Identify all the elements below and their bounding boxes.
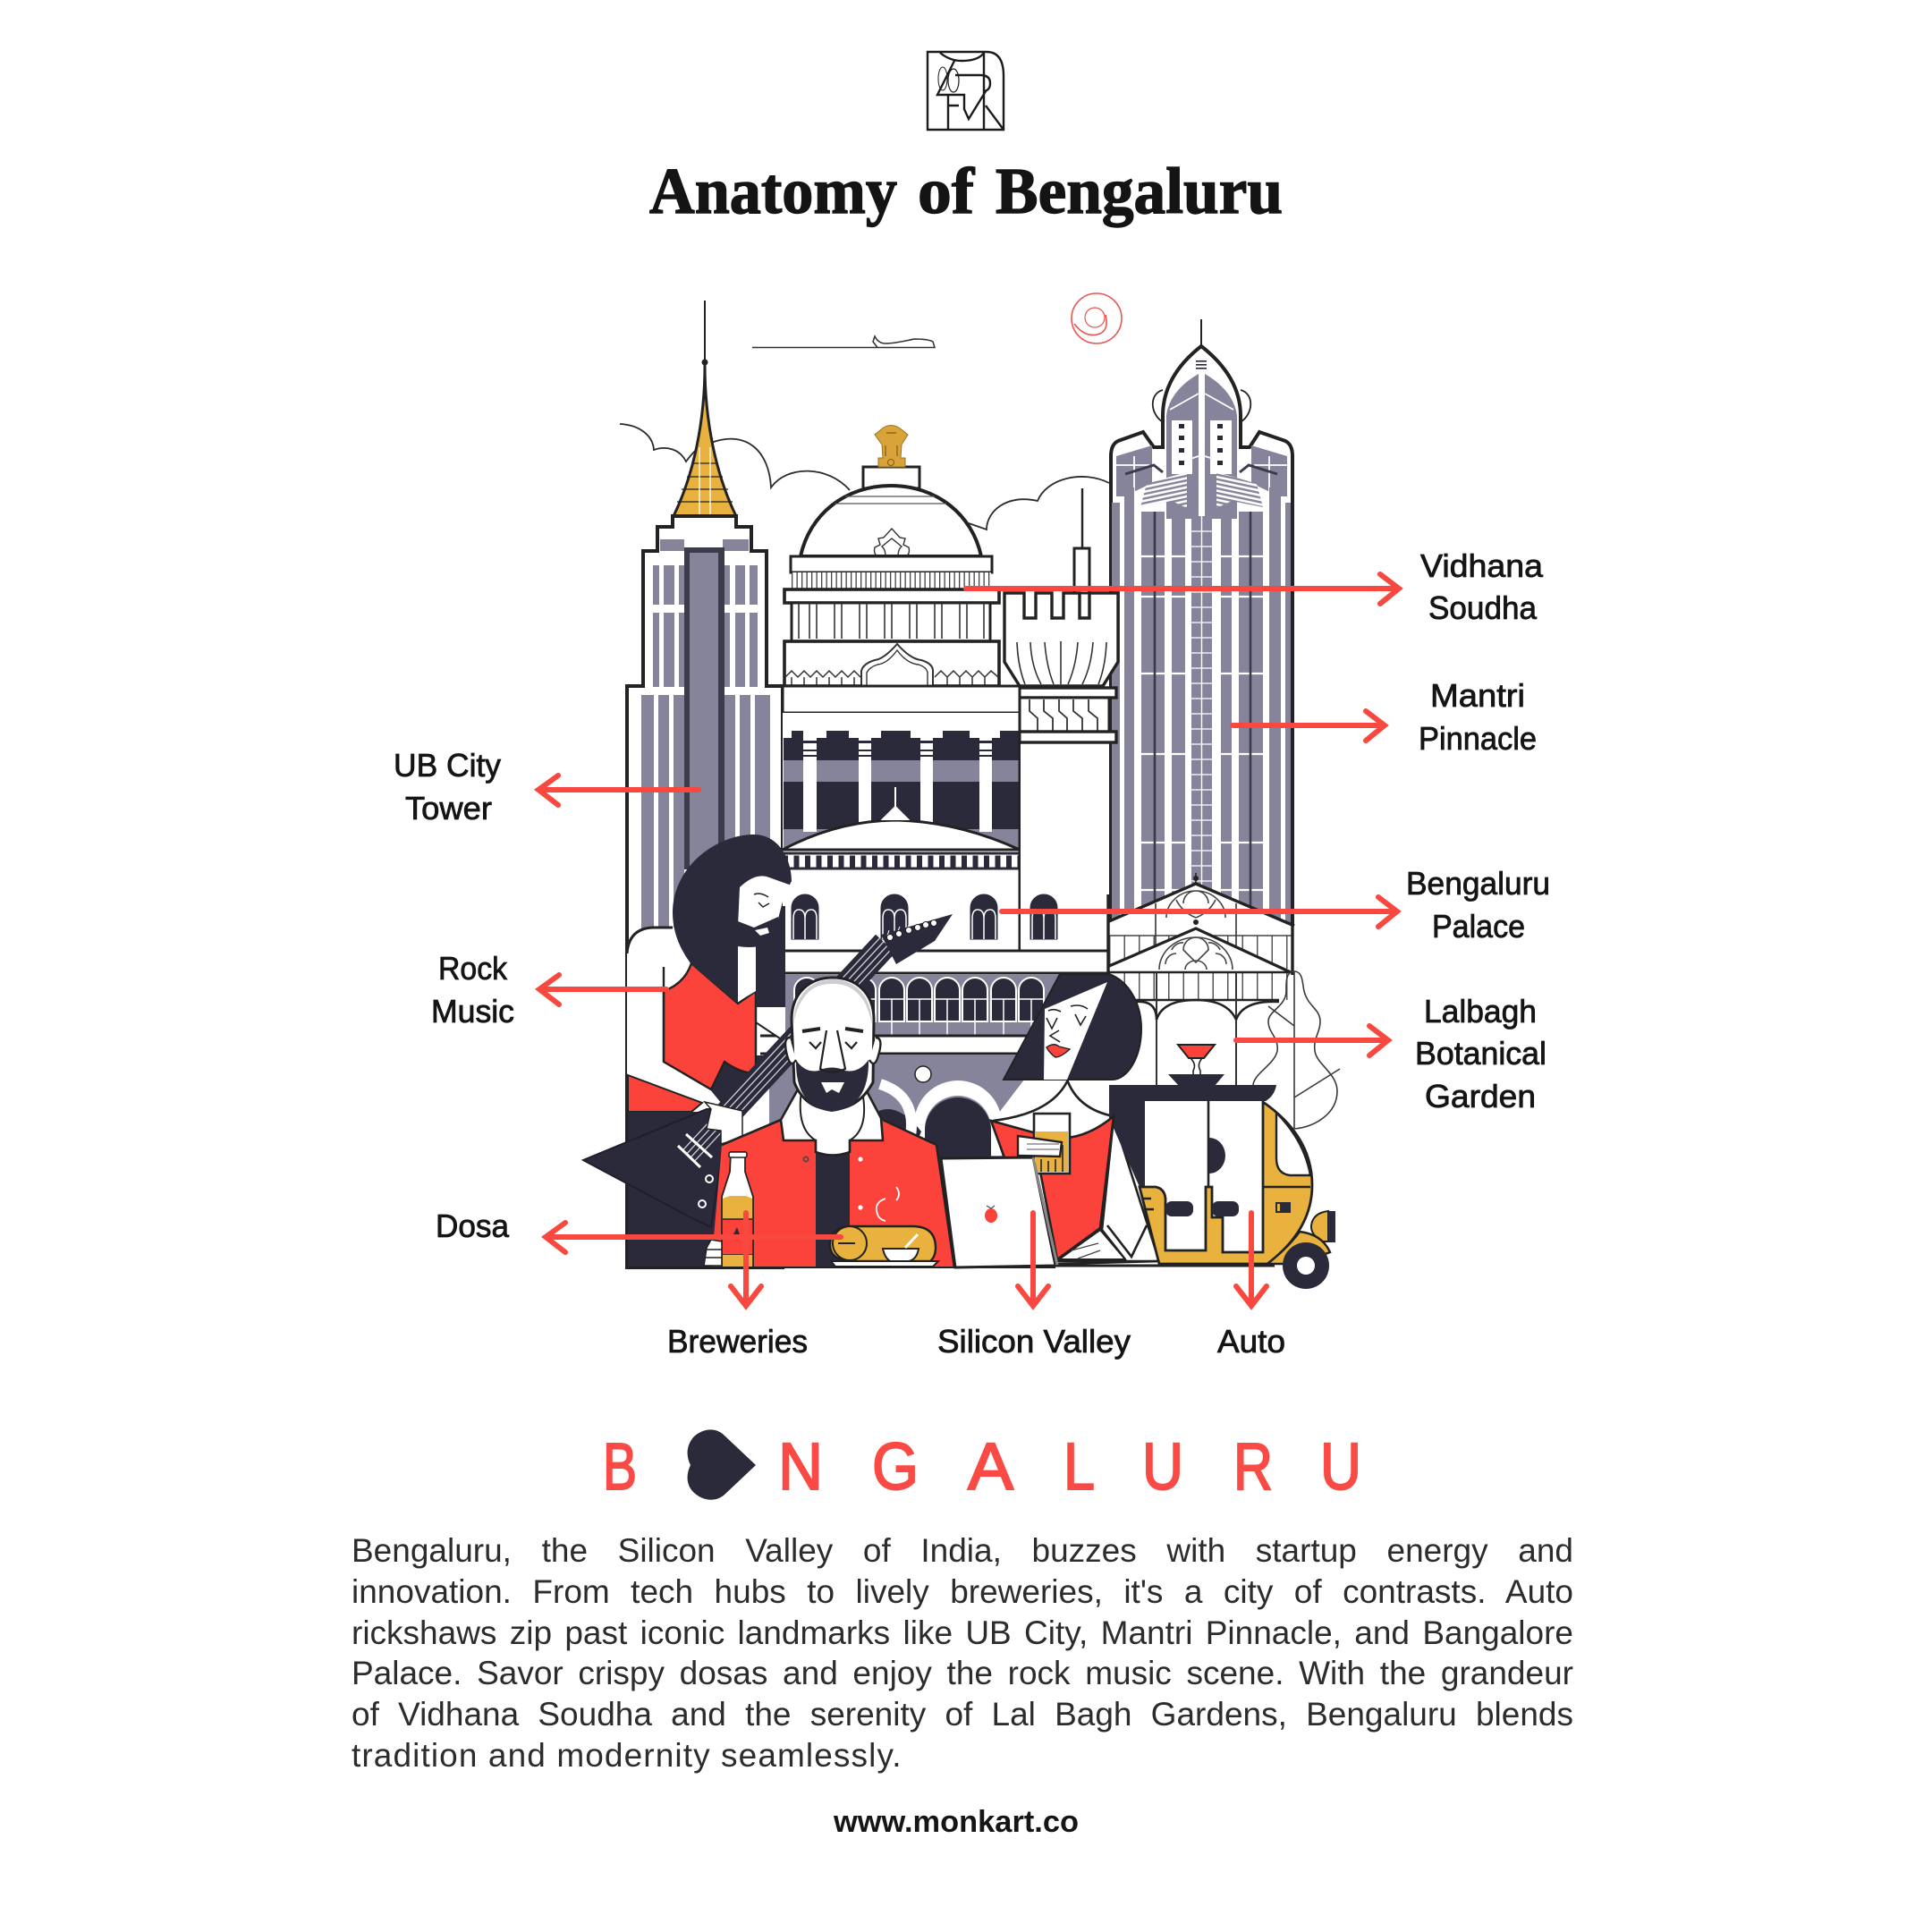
title [649, 155, 1283, 227]
arrow: Auto [1236, 1213, 1267, 1306]
tower spire [674, 365, 736, 516]
palace gate arch [914, 1080, 1002, 1156]
wordmark: BENGALURU: A [968, 1429, 1014, 1504]
wordmark: BENGALURU: N [778, 1429, 823, 1504]
description paragraph: innovation. From tech hubs to lively breweries, it's a city of contrasts. Auto [352, 1573, 1573, 1610]
label: Bengaluru Palace [1406, 865, 1550, 945]
label: Rock Music: Music [431, 993, 514, 1030]
building: Mantri Pinnacle [1111, 319, 1292, 948]
label: Dosa: Dosa [436, 1208, 510, 1244]
building: Bengaluru Palace [760, 686, 1109, 1162]
musician hair [673, 835, 792, 1007]
building: auto rickshaw [1055, 1085, 1335, 1289]
wordmark: BENGALURU: U [1142, 1429, 1183, 1504]
label: Auto: Auto [1217, 1323, 1285, 1360]
wordmark: BENGALURU [603, 1429, 1361, 1504]
label: Lalbagh Botanical Garden: Garden [1425, 1078, 1536, 1114]
label: Breweries: Breweries [667, 1323, 808, 1360]
arrow: Vidhana Soudha [966, 574, 1399, 604]
arrow: Dosa [546, 1223, 841, 1252]
label: Lalbagh Botanical Garden: Botanical [1415, 1035, 1546, 1072]
bottle [722, 1152, 753, 1267]
arrow: Mantri Pinnacle [1233, 711, 1385, 741]
clouds [620, 424, 1109, 530]
label: Bengaluru Palace: Palace [1432, 908, 1525, 945]
arrow: Bengaluru Palace [1002, 897, 1397, 927]
label: Mantri Pinnacle: Mantri [1430, 677, 1525, 714]
arrow: Breweries [731, 1213, 761, 1306]
website: www.monkart.co [833, 1805, 1079, 1839]
lips [1046, 1045, 1070, 1057]
arrow: Lalbagh [1236, 1026, 1388, 1055]
glass on table [1168, 1045, 1224, 1086]
wordmark: BENGALURU: U [1320, 1429, 1361, 1504]
shirt collar [781, 1089, 883, 1156]
auto headlight [1311, 1211, 1328, 1241]
icon: heart standing in for the letter E [688, 1429, 756, 1500]
building: Lalbagh Glass House [1108, 873, 1294, 1087]
description paragraph: Palace. Savor crispy dosas and enjoy the rock music scene. With the grandeur [352, 1655, 1573, 1691]
label: Vidhana Soudha: Vidhana [1420, 547, 1544, 584]
figure: bearded man [711, 978, 954, 1267]
arrow: Silicon Valley [1018, 1213, 1048, 1306]
title: Bengaluru [996, 155, 1283, 227]
label: UB City Tower: UB City [394, 747, 501, 784]
description paragraph: Bengaluru, the Silicon Valley of India, buzzes with startup energy and [352, 1532, 1573, 1569]
label: Bengaluru Palace: Bengaluru [1406, 865, 1550, 902]
palace arched windows [792, 894, 1057, 939]
label: UB City Tower: Tower [405, 790, 492, 826]
arrow: UB City Tower [538, 775, 699, 805]
musician hand [705, 1102, 742, 1144]
label: Mantri Pinnacle [1419, 677, 1537, 757]
wordmark: BENGALURU: L [1063, 1429, 1095, 1504]
figure: woman [993, 974, 1141, 1149]
building: turret [1004, 488, 1118, 742]
palace colonnade [784, 731, 1020, 852]
label: Lalbagh Botanical Garden [1415, 993, 1546, 1114]
laptop [941, 1157, 1057, 1267]
label: Silicon Valley: Silicon Valley [937, 1323, 1131, 1360]
label: Rock Music: Rock [438, 950, 508, 987]
figure: woman's top and beer [991, 1114, 1159, 1261]
description paragraph: of Vidhana Soudha and the serenity of Lal Bagh Gardens, Bengaluru blends [352, 1696, 1573, 1733]
beer glass [1034, 1114, 1070, 1174]
label: UB City Tower [394, 747, 501, 826]
description paragraph: tradition and modernity seamlessly. [352, 1737, 902, 1774]
guitar [583, 914, 953, 1227]
building: UB City Tower [627, 301, 783, 1267]
palace arcade [785, 975, 1072, 1036]
logo [928, 52, 1004, 130]
figure: rock musician [627, 835, 792, 1267]
label: Vidhana Soudha: Soudha [1428, 589, 1538, 626]
man head [792, 978, 874, 1109]
wordmark: BENGALURU: G [872, 1429, 919, 1504]
description paragraph [352, 1532, 1573, 1774]
plant outline [1253, 971, 1340, 1129]
label: Mantri Pinnacle: Pinnacle [1419, 720, 1537, 757]
books [704, 1240, 722, 1266]
dosa [830, 1187, 938, 1267]
description paragraph: rickshaws zip past iconic landmarks like UB City, Mantri Pinnacle, and Bangalore [352, 1614, 1573, 1651]
label: Rock Music [431, 950, 514, 1030]
sun [1072, 293, 1122, 343]
label: Vidhana Soudha [1420, 547, 1544, 626]
wordmark: BENGALURU: R [1233, 1429, 1273, 1504]
building: Vidhana Soudha [784, 426, 999, 688]
airplane [752, 336, 935, 347]
wordmark: BENGALURU: B [603, 1429, 637, 1504]
title: Anatomy [649, 155, 897, 227]
label: Lalbagh Botanical Garden: Lalbagh [1424, 993, 1537, 1030]
musician arm and body [627, 928, 785, 1103]
title: of [918, 155, 976, 227]
arrow: Rock Music [539, 975, 666, 1004]
auto wheel [1283, 1242, 1329, 1289]
emblem: lion capital [875, 426, 908, 467]
